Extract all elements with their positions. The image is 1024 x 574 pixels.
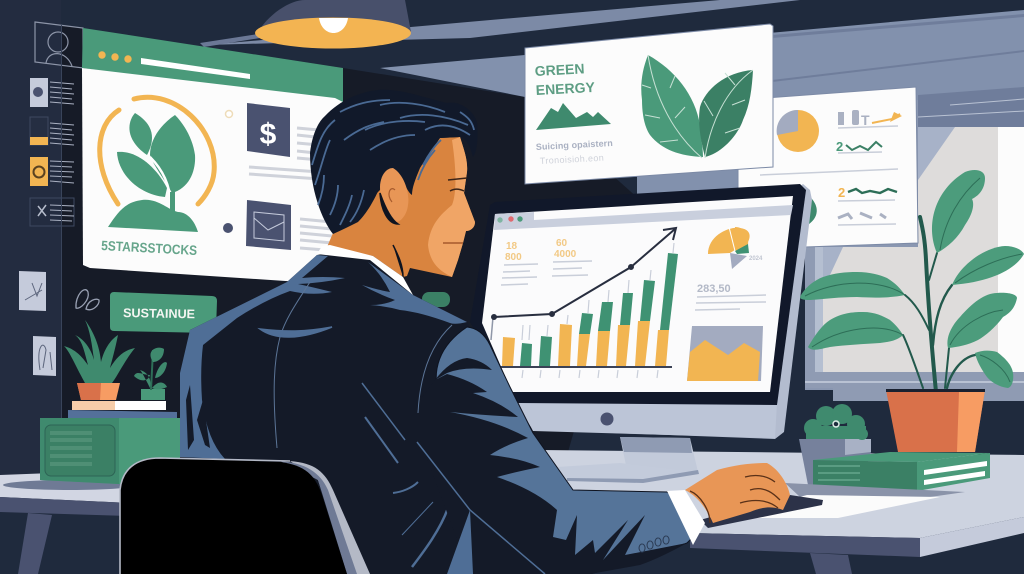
hand [685, 463, 790, 523]
icon: dollar [247, 103, 290, 157]
screen value: 283,50 [697, 283, 731, 295]
terracotta pot [886, 389, 985, 452]
screen value [695, 283, 766, 310]
sparkline rows: 2 [838, 185, 845, 200]
businessman [180, 90, 790, 574]
card subtext: Suicing opaistern [536, 138, 613, 152]
right desk surface [540, 450, 1024, 574]
logo: leaf sprout with ring [100, 97, 214, 232]
neck and face [327, 137, 475, 277]
hair [310, 90, 478, 234]
window glass [918, 127, 998, 372]
monitor [470, 184, 812, 483]
pie chart [777, 110, 819, 152]
plant: small sprig [134, 348, 167, 400]
screen stats: 18 [506, 241, 518, 252]
large leaves [641, 55, 753, 158]
lower body highlight [447, 510, 473, 574]
sparkline rows [760, 110, 902, 225]
area chart [687, 326, 763, 381]
icon: dollar: $ [260, 118, 277, 151]
sleeve [436, 327, 693, 574]
face highlight [428, 137, 475, 277]
logo wordmark: 5STARSSTOCKS [101, 238, 197, 258]
shirt collar [317, 245, 413, 295]
screen stats: 800 [505, 252, 522, 263]
screen stats: 60 [556, 238, 568, 249]
screen stats [501, 238, 592, 285]
shirt cuff [667, 490, 705, 545]
left suit drape [180, 255, 345, 459]
bar chart [491, 243, 678, 378]
sustain sign: SUSTAINUE [123, 306, 195, 321]
hair highlights [312, 100, 474, 225]
suit body [180, 253, 560, 574]
mountain icon [536, 103, 611, 130]
ceiling lamp [200, 0, 411, 48]
panel: green energy card: Tronoisioh.eon [540, 153, 604, 166]
panel: 5STARSSTOCKS website [82, 28, 345, 285]
green disc behind monitor [806, 195, 817, 226]
green book on desk [813, 452, 990, 491]
left wall profile icon [35, 22, 83, 68]
screen stats: 4000 [554, 249, 577, 260]
window frame [805, 100, 1024, 390]
office chair [120, 458, 370, 574]
sustain sign [110, 292, 217, 333]
left desk [0, 470, 137, 574]
right shoulder highlights [362, 262, 467, 324]
plant: spiky in terracotta pot [64, 320, 135, 400]
wall notes [19, 25, 99, 480]
donut pie [708, 227, 763, 269]
left wall sidebar items [30, 78, 74, 226]
right plant [800, 170, 1024, 452]
green tag [422, 292, 450, 307]
stacked books and box [40, 401, 180, 484]
panel: green energy card: ENERGY [535, 79, 596, 98]
power button [600, 412, 614, 426]
card heading: GREEN [534, 60, 585, 79]
icon: envelope [246, 200, 291, 250]
back creases [260, 282, 452, 567]
sleeve dark folds [420, 358, 687, 574]
browser bar [494, 205, 793, 230]
sparkline rows: 2 [836, 139, 843, 154]
monitor stand [557, 437, 699, 483]
paper and trackpad [700, 483, 965, 528]
donut pie: 2024 [749, 256, 763, 262]
small plant on desk [799, 404, 871, 485]
sleeve buttons [639, 536, 669, 552]
trend line arrow [492, 228, 676, 319]
brow, eye and mouth [448, 178, 467, 180]
ear [380, 168, 408, 222]
sparkline rows: T [861, 112, 870, 128]
panel: data card behind [738, 87, 918, 247]
panel: green energy card [525, 24, 773, 184]
